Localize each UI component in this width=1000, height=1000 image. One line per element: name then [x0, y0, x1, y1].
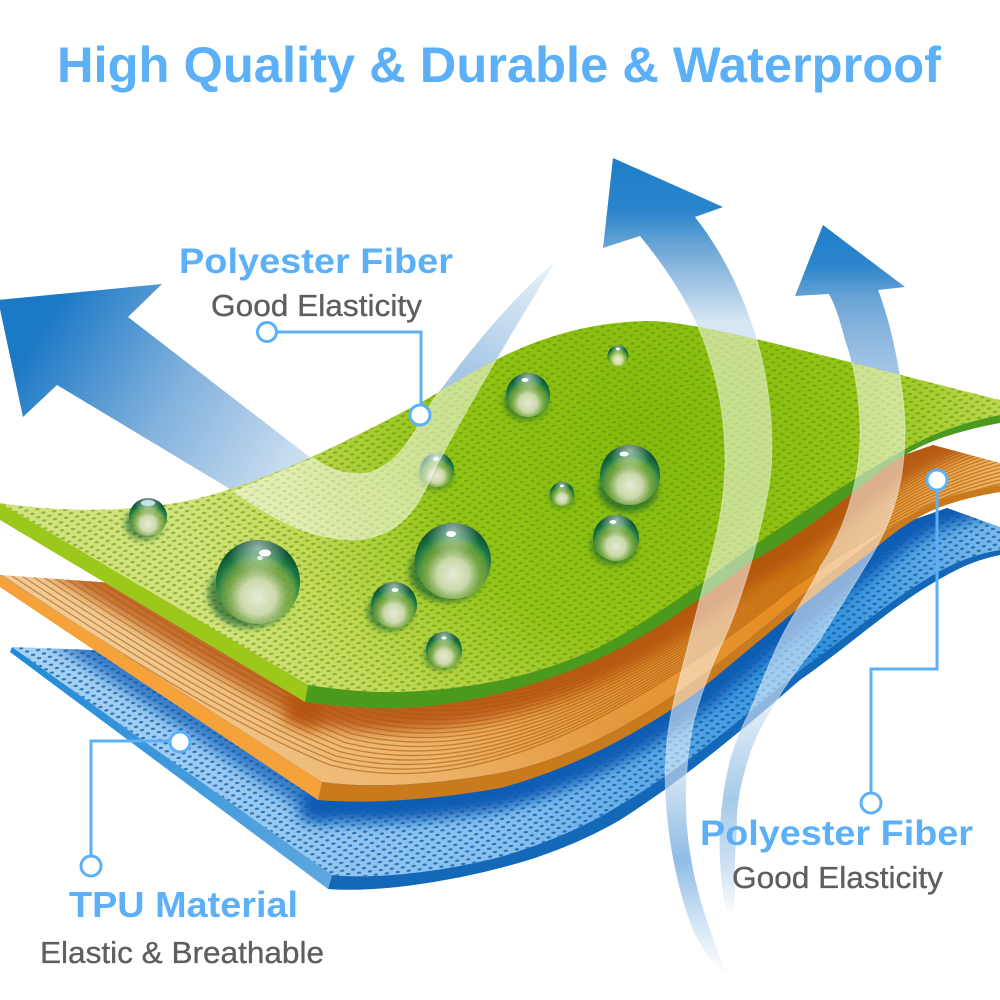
- label: right polyester fiber: Polyester Fiber: [700, 813, 973, 853]
- droplet 8: [419, 453, 454, 489]
- droplet 9: [550, 482, 574, 507]
- callout: TPU material: [81, 732, 190, 876]
- droplet 4: [424, 632, 462, 670]
- droplet 3: [367, 582, 417, 631]
- title: High Quality & Durable & Waterproof: [57, 36, 941, 93]
- arrow: thin air tail above fabric: [233, 262, 555, 540]
- callout: right polyester fiber: [861, 470, 947, 813]
- water droplets: [125, 346, 660, 670]
- layer: green top sheet: [0, 321, 1000, 708]
- label: TPU material: [40, 884, 324, 970]
- arrow: centre air flow: [603, 158, 772, 977]
- layer: blue TPU sheet: [0, 491, 1000, 890]
- arrow: left air flow: [0, 284, 320, 495]
- callout: top polyester fiber: [258, 322, 430, 425]
- droplet 5: [409, 523, 491, 602]
- droplet 7: [608, 346, 628, 366]
- label: top polyester fiber: [179, 241, 453, 323]
- label: top polyester fiber: Polyester Fiber: [179, 241, 453, 281]
- droplet 1: [125, 498, 167, 540]
- label: TPU material: Elastic & Breathable: [40, 935, 324, 970]
- label: TPU material: TPU Material: [69, 884, 298, 925]
- droplet 6: [504, 373, 550, 420]
- layer: orange middle sheet: [0, 445, 1000, 802]
- arrow: right air flow: [720, 225, 905, 917]
- droplet 10: [598, 445, 660, 512]
- label: right polyester fiber: Good Elasticity: [732, 860, 943, 895]
- label: right polyester fiber: [700, 813, 973, 895]
- droplet 11: [591, 515, 639, 565]
- label: top polyester fiber: Good Elasticity: [211, 288, 422, 323]
- translucent air bands over fabric: [232, 326, 906, 790]
- droplet 2: [208, 540, 300, 628]
